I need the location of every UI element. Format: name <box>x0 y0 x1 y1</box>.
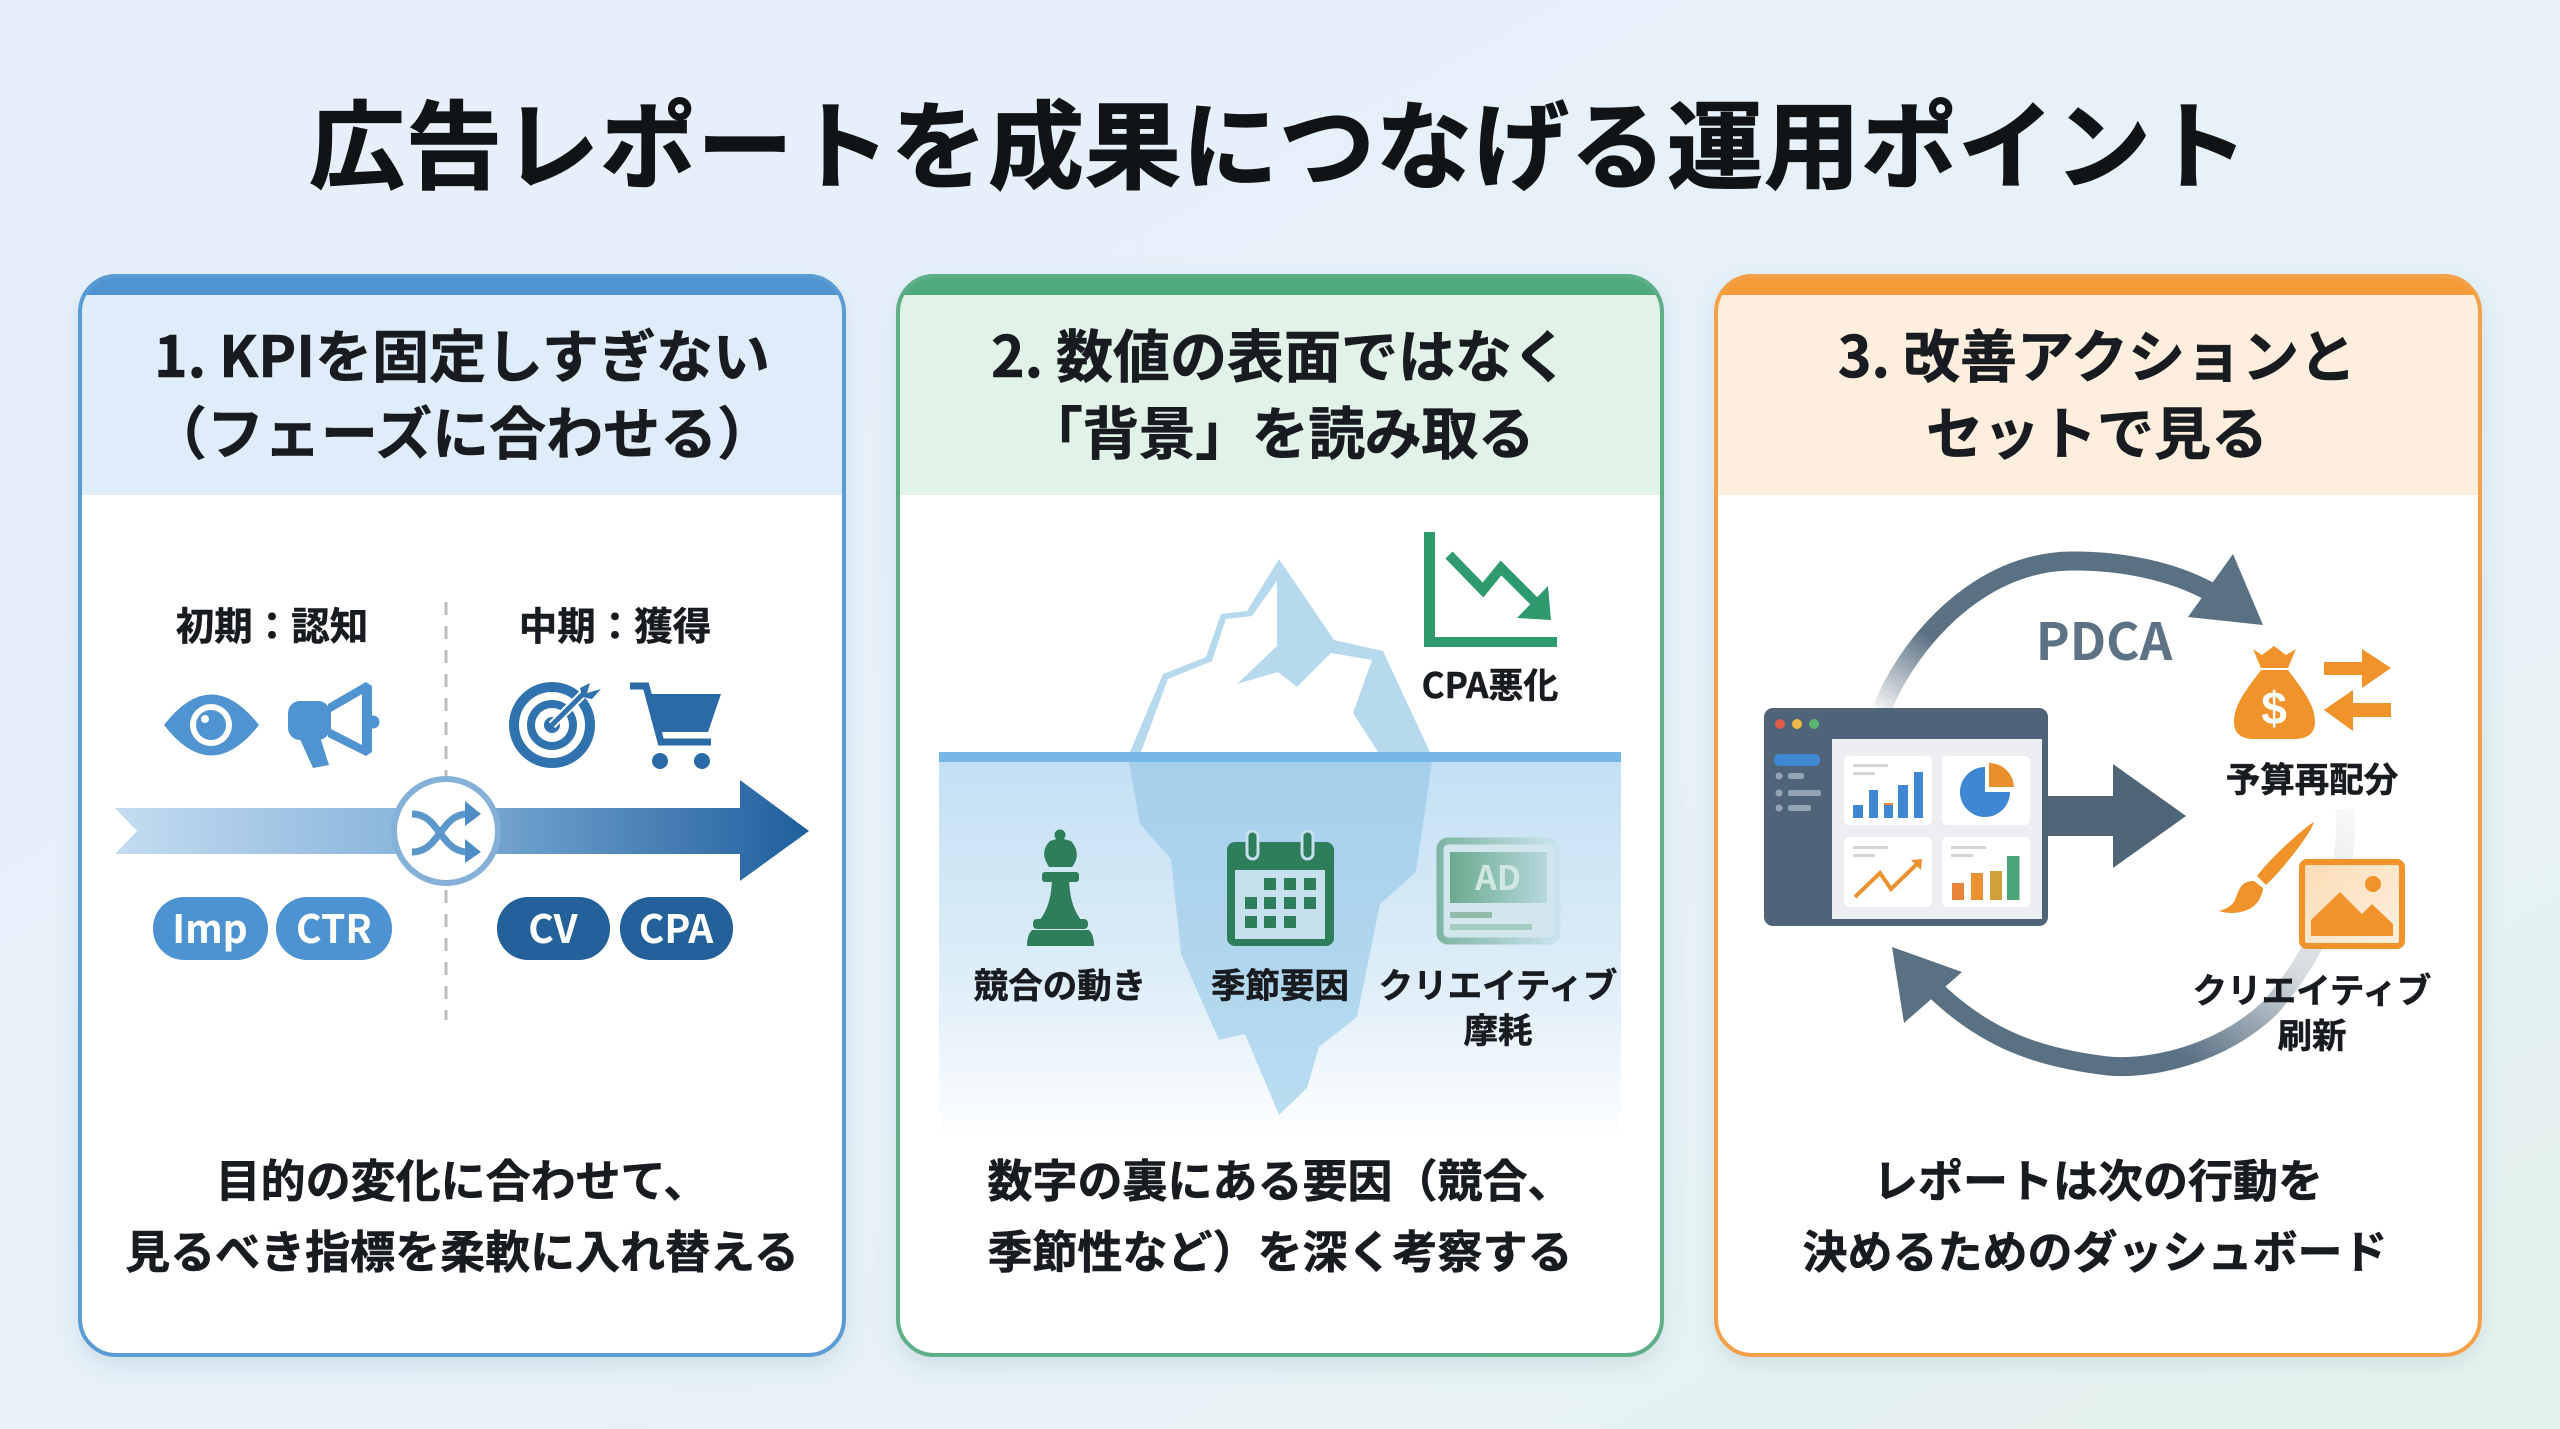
panel: 3 actions <box>1714 274 2482 1357</box>
card frame: actions <box>1714 274 2482 1357</box>
arrow: report to action <box>2048 764 2186 868</box>
icon: image <box>2302 862 2402 946</box>
heading: actions <box>1838 312 2356 471</box>
icon: faded ad <box>1440 841 1557 941</box>
body text: actions <box>1802 1145 2388 1281</box>
body text: actions: 決めるためのダッシュボード <box>1802 1216 2388 1281</box>
body text: background: 数字の裏にある要因（競合、 <box>987 1145 1573 1210</box>
arrow: phase flow <box>115 780 809 881</box>
waterline <box>939 752 1621 762</box>
metric pills: CTR <box>296 899 372 955</box>
icon: megaphone <box>288 682 380 768</box>
label: budget reallocation: 予算再配分 <box>2226 752 2399 802</box>
factor labels: 摩耗 <box>1464 1003 1532 1053</box>
factor labels <box>974 958 1617 1053</box>
icon: CPA trend chart <box>1424 532 1557 647</box>
body text: KPI: 見るべき指標を柔軟に入れ替える <box>125 1216 799 1281</box>
heading: actions: 3. 改善アクションと <box>1838 312 2356 394</box>
icon: eye <box>164 694 259 756</box>
card frame: KPI <box>78 274 846 1357</box>
label: creative refresh: 刷新 <box>2278 1008 2346 1058</box>
label: CPA worsened: CPA悪化 <box>1422 658 1558 709</box>
body text: KPI <box>125 1145 799 1281</box>
body text: background: 季節性など）を深く考察する <box>987 1216 1573 1281</box>
body text: background <box>987 1145 1573 1281</box>
metric pills <box>153 897 733 960</box>
metric pills: CV <box>528 899 579 955</box>
heading: background <box>991 312 1569 471</box>
phase labels: 初期：認知 <box>176 596 368 652</box>
icon: faded ad: AD <box>1474 851 1521 900</box>
heading: actions: セットで見る <box>1926 389 2268 471</box>
heading: background: 「背景」を読み取る <box>1026 389 1534 471</box>
water <box>939 762 1621 1136</box>
heading: KPI <box>150 312 774 471</box>
arrow: PDCA top arc <box>1882 554 2263 709</box>
metric pills: CPA <box>639 899 714 955</box>
label: creative refresh: クリエイティブ <box>2193 963 2431 1013</box>
icon: cart <box>630 686 721 769</box>
icon: shuffle <box>394 779 498 883</box>
heading: KPI: 1. KPIを固定しすぎない <box>154 312 770 394</box>
phase labels <box>176 596 711 652</box>
title: 広告レポートを成果につなげる運用ポイント <box>309 70 2249 209</box>
panel: 2 background <box>896 274 1664 1357</box>
icon: chess piece <box>1027 830 1094 946</box>
factor labels: 競合の動き <box>974 958 1146 1008</box>
heading: background: 2. 数値の表面ではなく <box>991 312 1569 394</box>
iceberg <box>1129 559 1432 1115</box>
label: creative refresh <box>2193 963 2431 1058</box>
icon: target <box>514 683 601 763</box>
icon: money bag and exchange arrows <box>2234 646 2391 739</box>
metric pills: Imp <box>172 899 248 955</box>
icon: money bag and exchange arrows: $ <box>2261 682 2287 734</box>
factor labels: クリエイティブ <box>1379 958 1617 1008</box>
body text: actions: レポートは次の行動を <box>1873 1145 2323 1210</box>
icon: paintbrush <box>2219 822 2314 913</box>
card frame: background <box>896 274 1664 1357</box>
body text: KPI: 目的の変化に合わせて、 <box>216 1145 708 1210</box>
phase divider <box>444 602 448 1020</box>
phase labels: 中期：獲得 <box>519 596 711 652</box>
panel: 1 KPI <box>78 274 846 1357</box>
factor labels: 季節要因 <box>1211 958 1349 1008</box>
label: PDCA: PDCA <box>2036 601 2173 675</box>
heading: KPI: （フェーズに合わせる） <box>150 389 774 471</box>
arrow: PDCA bottom arc <box>1892 809 2346 1067</box>
icon: dashboard <box>1764 708 2048 926</box>
icon: calendar <box>1227 831 1334 946</box>
